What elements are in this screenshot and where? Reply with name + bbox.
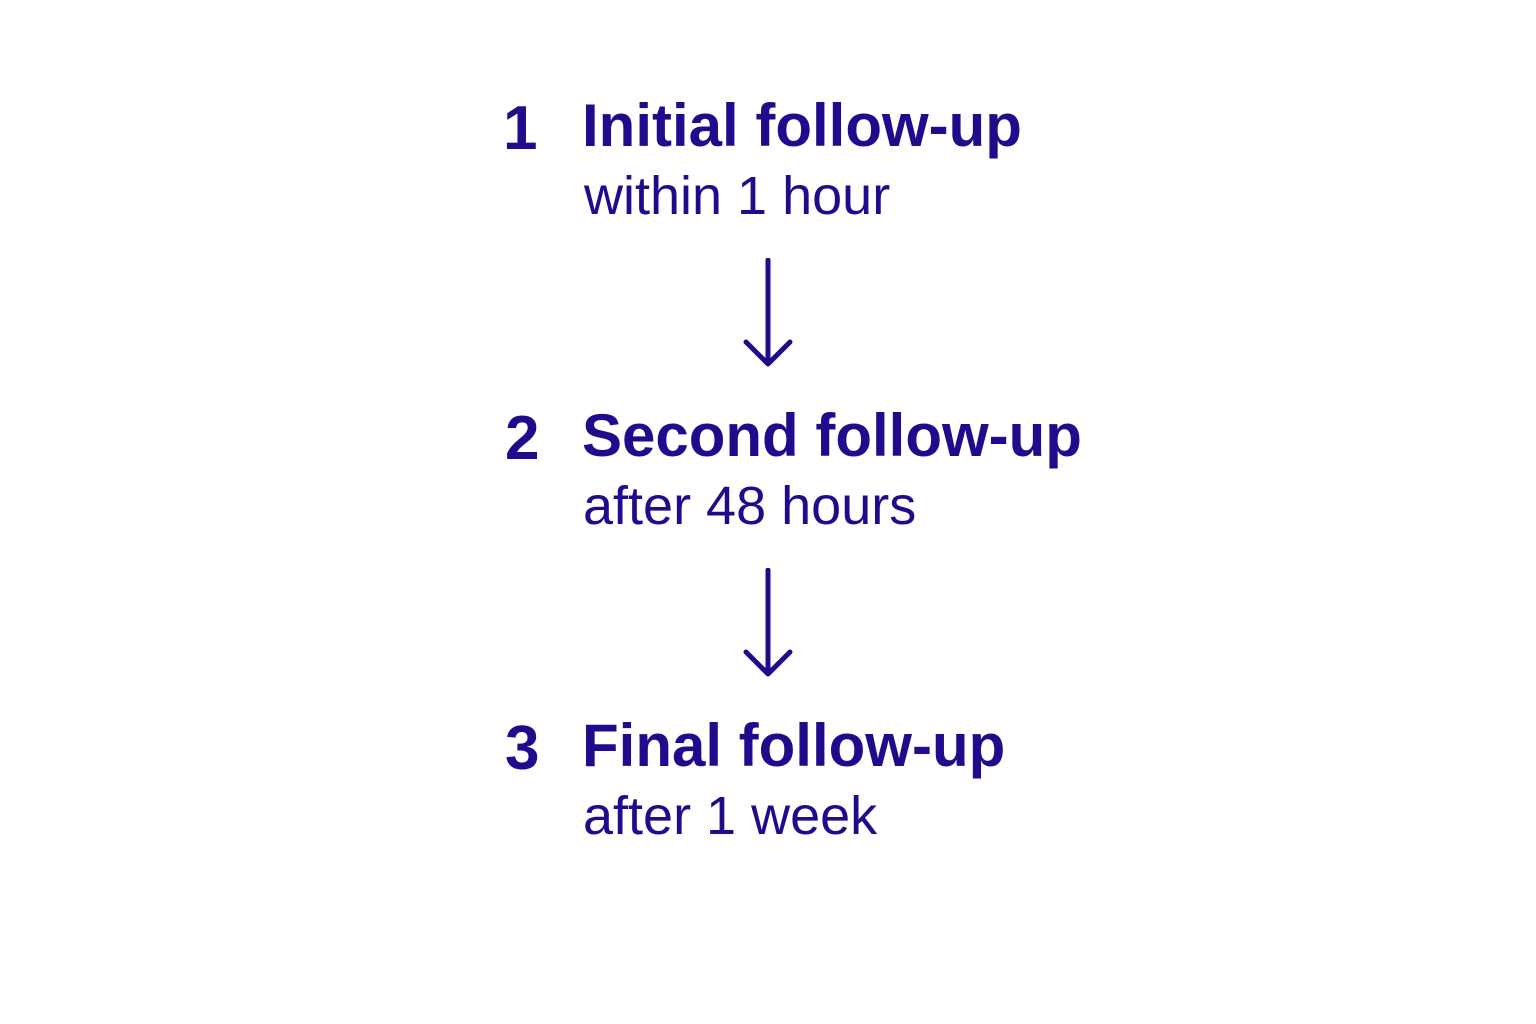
step 1: [503, 92, 1022, 226]
title: Initial follow-up: Initial follow-up: [582, 92, 1022, 159]
arrow 1: [744, 258, 792, 366]
step 2: [505, 402, 1082, 536]
title: Final follow-up: Final follow-up: [582, 712, 1005, 779]
subtitle: within 1 hour: within 1 hour: [584, 166, 890, 226]
subtitle: after 48 hours: after 48 hours: [583, 476, 916, 536]
arrow 2: [744, 568, 792, 676]
number 2: 2: [505, 404, 539, 473]
subtitle: after 1 week: after 1 week: [583, 786, 877, 846]
number 3: 3: [505, 714, 539, 783]
title: Second follow-up: Second follow-up: [582, 402, 1082, 469]
step 3: [505, 712, 1005, 846]
number 1: 1: [503, 94, 537, 163]
